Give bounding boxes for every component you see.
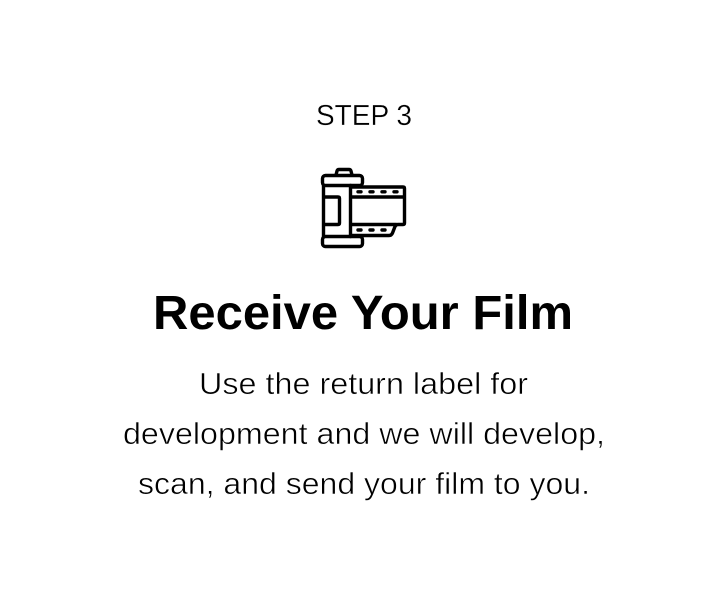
body text: development and we will develop, <box>123 416 605 451</box>
step label: STEP 3 <box>316 100 412 132</box>
body text: Use the return label for <box>199 366 528 401</box>
heading: Receive Your Film <box>153 287 573 340</box>
body text: scan, and send your film to you. <box>138 466 590 501</box>
body text <box>123 366 605 501</box>
icon: film canister <box>322 170 404 246</box>
